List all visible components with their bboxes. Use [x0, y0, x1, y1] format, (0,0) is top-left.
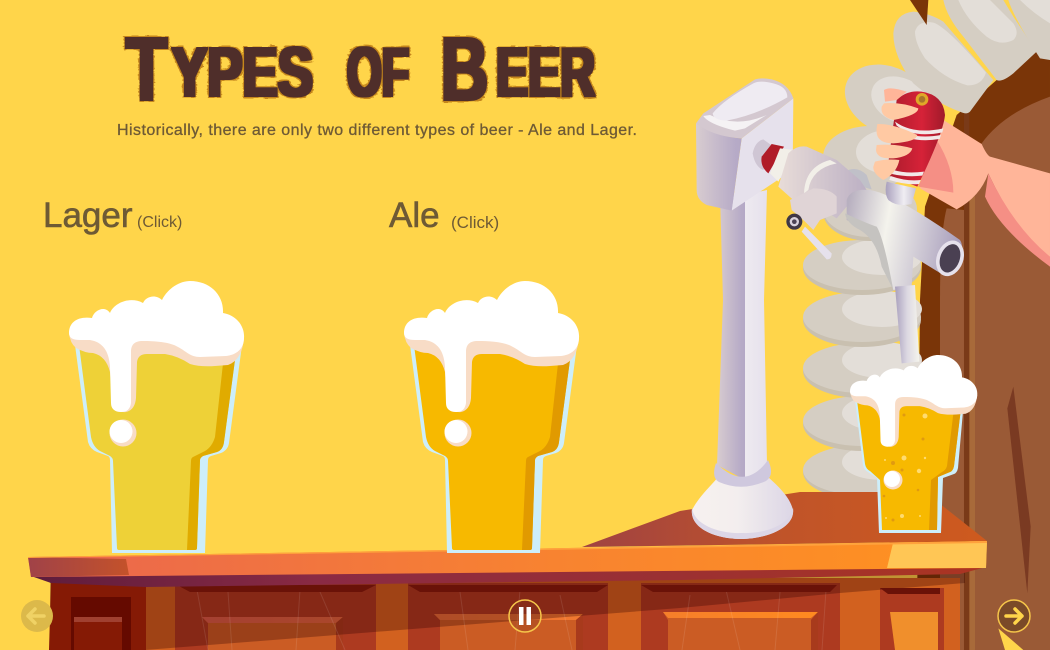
- lever nut: [790, 188, 837, 230]
- panel 4: [880, 588, 944, 650]
- ale glass: [404, 281, 579, 553]
- title: YPES: [172, 33, 313, 111]
- inner panel 1: [202, 617, 343, 650]
- bar front edge: [28, 541, 987, 587]
- ale label: Ale: [389, 196, 440, 235]
- ale label: (Click): [451, 213, 499, 232]
- spout opening: [931, 237, 969, 280]
- lager label: [43, 196, 182, 235]
- panel top trims: [177, 585, 940, 594]
- bar top surface: [582, 492, 987, 547]
- handle collar: [886, 182, 916, 205]
- spout: [847, 190, 962, 290]
- cabinet below the bar: [49, 570, 965, 650]
- faucet body: [778, 146, 867, 218]
- lager glass: [69, 281, 244, 553]
- panel 2: [408, 583, 608, 650]
- tap column and base: [692, 190, 793, 539]
- tap head and faucet: [696, 78, 1050, 363]
- arm: [920, 120, 1050, 267]
- title: B: [441, 20, 488, 120]
- inner panel 2: [434, 614, 583, 650]
- subtitle: Historically, there are only two different types of beer - Ale and Lager.: [117, 122, 637, 139]
- silver disc: [845, 169, 872, 189]
- title: EER: [496, 33, 595, 111]
- wood scratches: [197, 590, 826, 650]
- lever arm: [802, 227, 832, 259]
- left cabinet end: [49, 582, 146, 650]
- curtain pads at top right: [893, 0, 1050, 113]
- coiled rope pads: [803, 51, 943, 499]
- red handle: [887, 91, 945, 187]
- thumb: [884, 88, 907, 102]
- tap head: [732, 98, 793, 211]
- panel side shading: [336, 612, 818, 650]
- panel 1: [175, 583, 376, 650]
- nozzle: [895, 285, 919, 363]
- hand on red handle: [873, 88, 1050, 267]
- lager label: Lager: [43, 196, 133, 235]
- lever pivot: [786, 214, 802, 230]
- inner panel 3: [663, 612, 818, 650]
- fingers: [873, 103, 918, 180]
- small glass being filled: [850, 355, 977, 533]
- title: [126, 20, 595, 120]
- wooden wall: [917, 50, 1050, 650]
- handle stripes: [889, 122, 943, 184]
- next button: [998, 600, 1030, 632]
- panel 3: [641, 583, 840, 650]
- pause button: [509, 600, 541, 632]
- title: T: [126, 20, 167, 120]
- red knob: [753, 139, 773, 170]
- diagonal shadow: [50, 570, 965, 650]
- lager label: (Click): [137, 214, 182, 231]
- inner panel 4: [890, 612, 938, 650]
- ale label: [389, 196, 499, 235]
- inner panel trims: [202, 612, 818, 623]
- title: OF: [347, 33, 409, 111]
- back button: [21, 600, 53, 632]
